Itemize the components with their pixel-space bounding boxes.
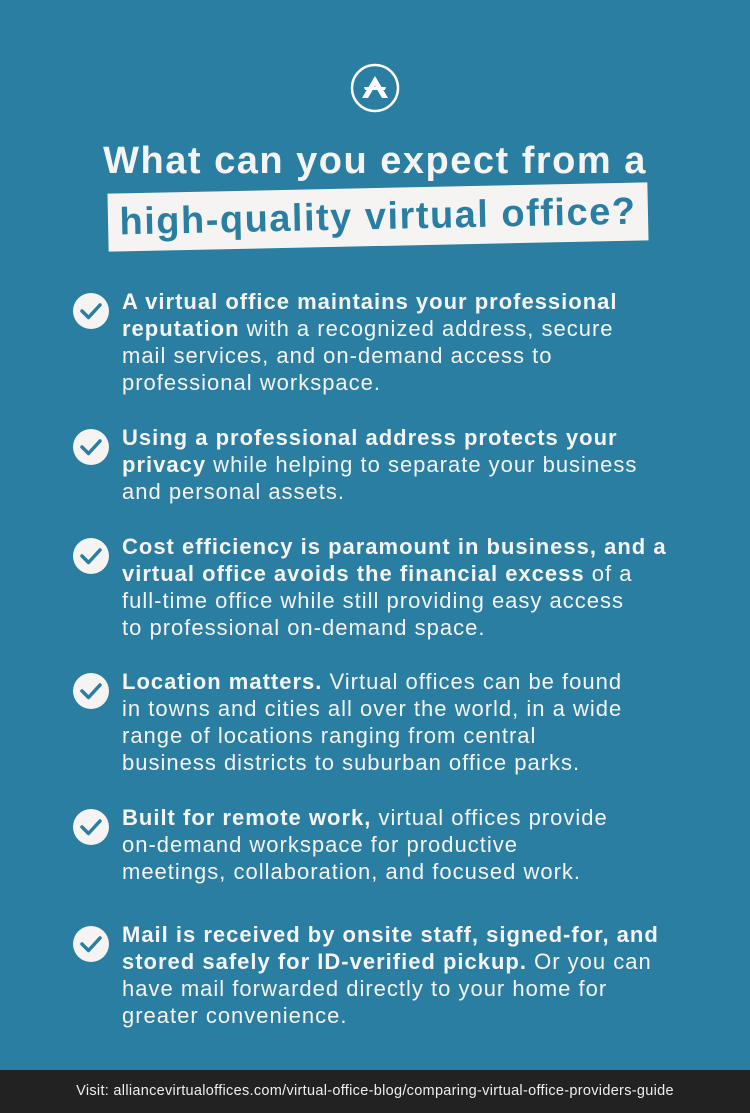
icon: check [73,429,109,465]
text 6: stored safely for ID-verified pickup. Or you can [122,949,652,974]
text 2: privacy while helping to separate your business [122,452,637,477]
text 2 [122,425,637,504]
text 1: reputation with a recognized address, secure [122,316,614,341]
title: What can you expect from a [103,140,647,182]
footer: Visit: alliancevirtualoffices.com/virtual-office-blog/comparing-virtual-office-providers-guide [76,1083,674,1099]
footer [0,1070,750,1113]
text 3: virtual office avoids the financial excess of a [122,561,632,586]
text 1 [122,289,618,395]
text 5 [122,805,608,884]
text 5: Built for remote work, virtual offices provide [122,805,608,830]
text 3 [122,534,667,640]
text 6: Mail is received by onsite staff, signed-for, and [122,922,659,947]
item 2 [73,425,637,504]
text 4: Location matters. Virtual offices can be found [122,669,622,694]
text 4: range of locations ranging from central [122,723,536,748]
text 6 [122,922,659,1028]
text 5: on-demand workspace for productive [122,832,518,857]
text 6: have mail forwarded directly to your home for [122,976,607,1001]
text 6: greater convenience. [122,1003,347,1028]
text 1: A virtual office maintains your professional [122,289,618,314]
icon: check [73,809,109,845]
text 4: business districts to suburban office parks. [122,750,580,775]
icon: check [73,926,109,962]
item 4 [73,669,622,775]
item 3 [73,534,667,640]
title highlight box: high-quality virtual office? [119,191,637,243]
text 1: mail services, and on-demand access to [122,343,553,368]
item 6 [73,922,659,1028]
item 1 [73,289,618,395]
text 5: meetings, collaboration, and focused work. [122,859,581,884]
text 3: to professional on-demand space. [122,615,485,640]
text 3: full-time office while still providing easy access [122,588,624,613]
text 4: in towns and cities all over the world, in a wide [122,696,622,721]
text 4 [122,669,622,775]
icon: check [73,538,109,574]
item 5 [73,805,608,884]
text 3: Cost efficiency is paramount in business, and a [122,534,667,559]
text 2: and personal assets. [122,479,345,504]
text 2: Using a professional address protects your [122,425,618,450]
text 1: professional workspace. [122,370,381,395]
icon: check [73,673,109,709]
icon: check [73,293,109,329]
icon: logo [350,64,400,112]
